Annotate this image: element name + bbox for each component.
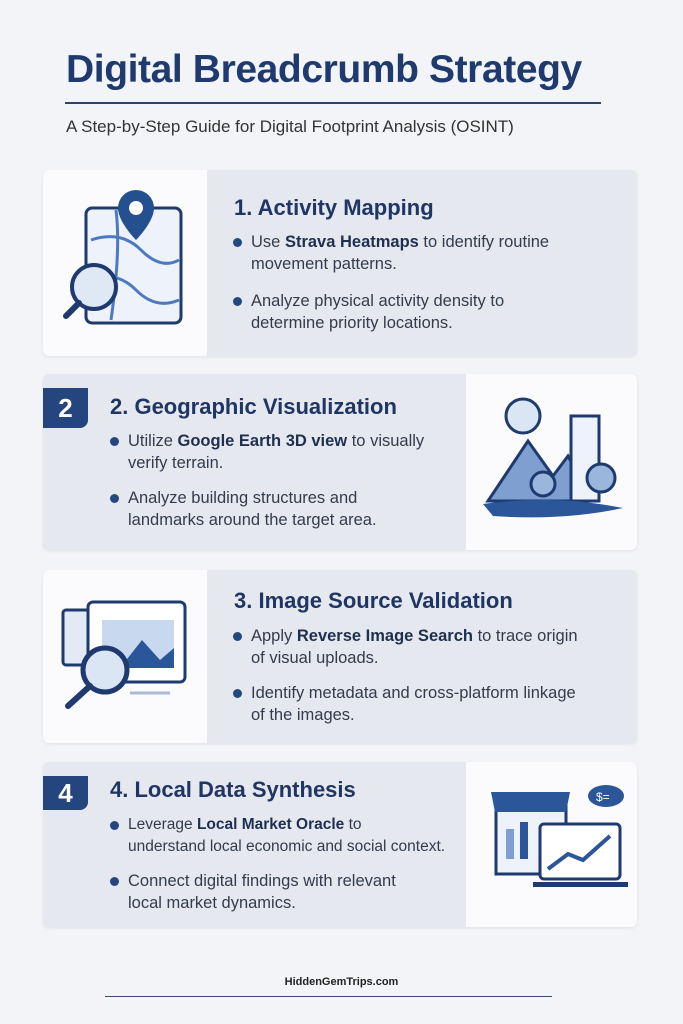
panel: step 3: Identify metadata and cross-platform linkage (251, 684, 576, 702)
icon: market and chart (491, 785, 628, 887)
badge: 2 (58, 393, 73, 423)
bullets (110, 430, 424, 474)
bullets: understand local economic and social context. (128, 838, 445, 855)
badge: 4 (58, 778, 73, 808)
icon: market and chart: $= (596, 790, 610, 804)
heading: 4. Local Data Synthesis (110, 777, 356, 802)
panel: step 1 (43, 170, 637, 356)
panel: step 3: of the images. (251, 706, 355, 724)
badge (43, 776, 88, 810)
bullets: Utilize Google Earth 3D view to visually (128, 432, 424, 450)
icon: map with pin (63, 190, 182, 324)
bullets: Apply Reverse Image Search to trace origin (251, 627, 578, 645)
bullets: movement patterns. (251, 255, 397, 273)
bullets (233, 625, 578, 669)
bullets: of visual uploads. (251, 649, 378, 667)
heading: 2. Geographic Visualization (110, 394, 397, 419)
panel: step 4: Connect digital findings with relevant (128, 872, 396, 890)
panel: step 2: Analyze building structures and (128, 489, 357, 507)
panel: step 1: Analyze physical activity density to (251, 292, 504, 310)
panel: step 2: landmarks around the target area. (128, 511, 377, 529)
panel: step 1: determine priority locations. (251, 314, 453, 332)
bullets: verify terrain. (128, 454, 223, 472)
heading: 1. Activity Mapping (234, 195, 434, 220)
icon: landscape city (483, 398, 623, 518)
bullets: Leverage Local Market Oracle to (128, 816, 362, 833)
heading: 3. Image Source Validation (234, 588, 513, 613)
panel: step 4 (43, 762, 637, 927)
footer: HiddenGemTrips.com (285, 976, 398, 988)
panel: step 2 (43, 374, 637, 550)
bullets: Use Strava Heatmaps to identify routine (251, 233, 549, 251)
title: Digital Breadcrumb Strategy (66, 48, 582, 91)
bullets (110, 814, 445, 858)
badge (43, 388, 88, 428)
bullets (233, 231, 549, 275)
panel: step 4: local market dynamics. (128, 894, 296, 912)
panel: step 3 (43, 570, 637, 743)
icon: image search (62, 600, 186, 709)
subtitle: A Step-by-Step Guide for Digital Footprint Analysis (OSINT) (66, 117, 514, 136)
